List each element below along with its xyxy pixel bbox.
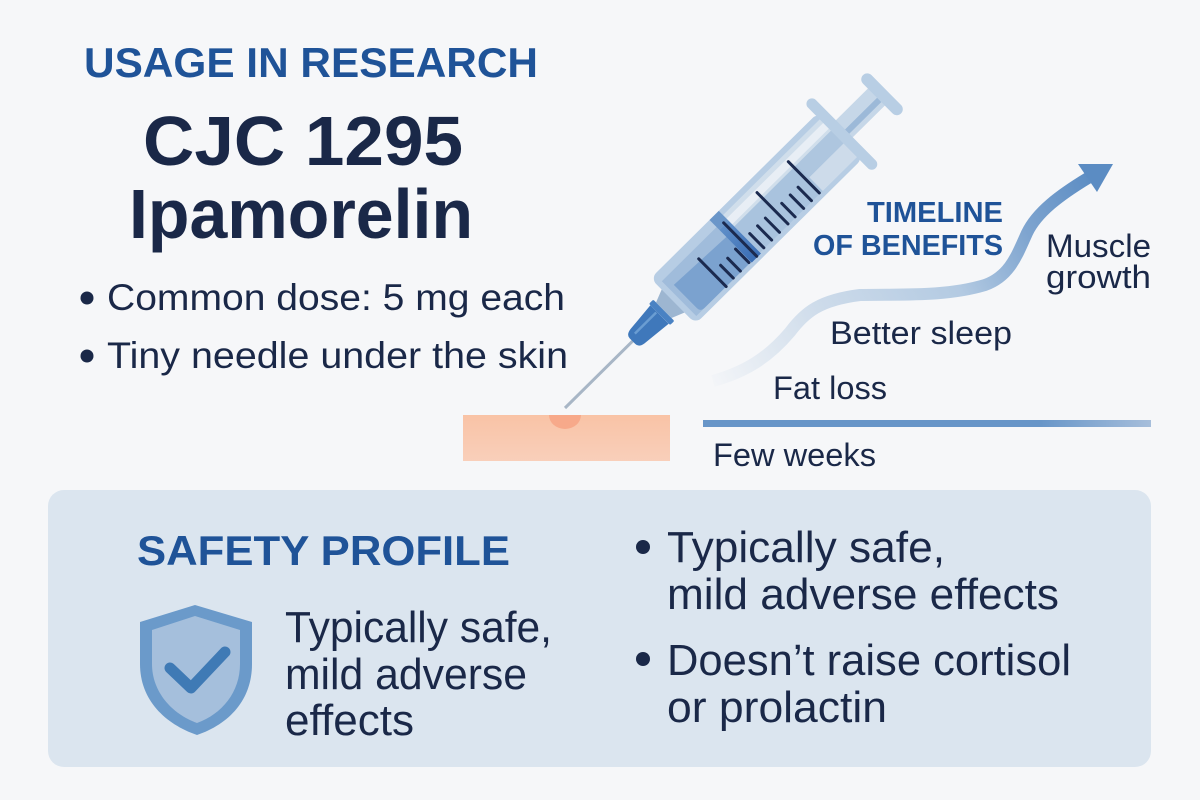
title: Ipamorelin (129, 175, 473, 253)
neck (652, 288, 686, 322)
usage bullet list: Tiny needle under the skin (107, 335, 568, 376)
barrel flange (804, 96, 880, 172)
timeline heading: TIMELINE (867, 197, 1003, 229)
label: muscle growth: growth (1046, 259, 1151, 295)
syringe illustration (531, 56, 920, 442)
panel: safety profile (48, 490, 1151, 767)
eyebrow heading: usage in research: USAGE IN RESEARCH (84, 39, 538, 86)
needle (564, 338, 636, 409)
label: muscle growth (1046, 228, 1151, 295)
label: few weeks: Few weeks (713, 437, 876, 473)
shield caption: mild adverse (285, 650, 527, 699)
skin block with injection spot (463, 415, 670, 461)
shield caption: effects (285, 696, 414, 745)
usage bullet list: Common dose: 5 mg each (107, 277, 565, 318)
graduation ticks (693, 160, 820, 287)
label: better sleep: Better sleep (830, 315, 1012, 351)
usage bullet list (80, 277, 568, 376)
title: CJC 1295 (143, 102, 463, 180)
safety bullet list: or prolactin (667, 683, 887, 732)
label: fat loss: Fat loss (773, 370, 887, 406)
timeline baseline (703, 420, 1151, 427)
safety bullet list: mild adverse effects (667, 570, 1059, 619)
icon: shield with check (140, 605, 252, 735)
rubber stopper (710, 211, 761, 263)
barrel (651, 112, 863, 324)
safety bullet list: Doesn’t raise cortisol (667, 636, 1071, 685)
plunger rod (829, 85, 888, 144)
liquid (662, 226, 752, 316)
shield caption (285, 603, 552, 745)
needle hub (623, 305, 669, 350)
plunger top flange (859, 71, 905, 118)
safety bullet list (636, 523, 1071, 732)
title (129, 102, 473, 253)
safety bullet list: Typically safe, (667, 523, 945, 572)
shield caption: Typically safe, (285, 603, 552, 652)
rising benefits arrow (713, 164, 1113, 381)
timeline heading: OF BENEFITS (813, 230, 1003, 262)
label: muscle growth: Muscle (1046, 228, 1151, 264)
safety heading: SAFETY PROFILE (137, 527, 510, 574)
timeline heading (813, 197, 1003, 262)
